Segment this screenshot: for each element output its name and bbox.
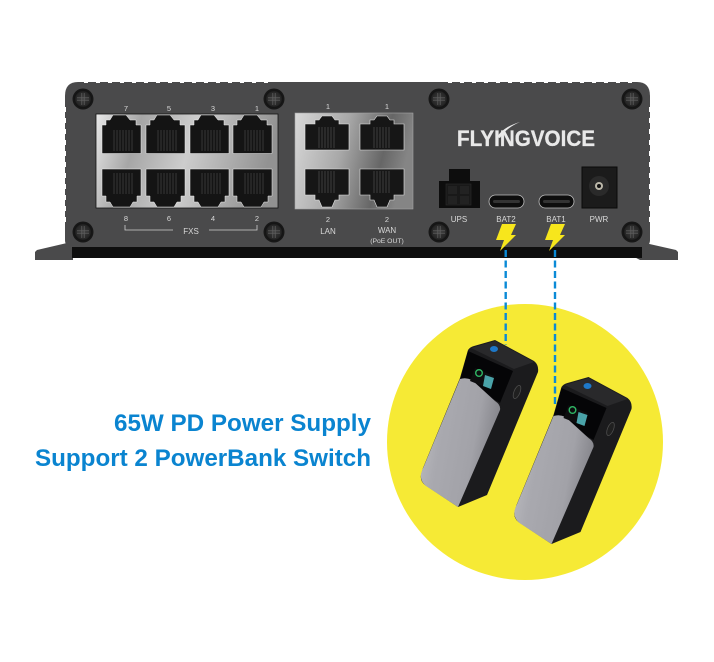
icon: BAT1 lightning bolt xyxy=(545,224,565,251)
BAT2 USB-C port xyxy=(489,195,524,208)
headline line 2: Support 2 PowerBank Switch xyxy=(35,445,371,472)
FXS port panel xyxy=(96,114,278,208)
PWR jack xyxy=(582,167,617,208)
port labels: FXS xyxy=(183,227,199,236)
dashed connector BAT2 xyxy=(505,250,507,345)
port labels: UPS xyxy=(451,215,467,224)
port labels: 7 xyxy=(124,104,128,113)
left mounting flange xyxy=(35,243,73,260)
port labels: 5 xyxy=(167,104,171,113)
UPS connector xyxy=(439,169,480,208)
right mounting flange xyxy=(617,243,678,260)
port labels: 1 xyxy=(385,102,389,111)
port labels: 2 xyxy=(385,215,389,224)
port labels: 6 xyxy=(167,214,171,223)
port labels: (PoE OUT) xyxy=(370,238,404,245)
headline text xyxy=(35,410,372,472)
yellow circle xyxy=(387,304,663,580)
BAT1 USB-C port xyxy=(539,195,574,208)
icon: BAT2 lightning bolt xyxy=(496,224,516,251)
FXS bracket xyxy=(125,225,257,230)
port labels: PWR xyxy=(590,215,609,224)
port labels: 1 xyxy=(255,104,259,113)
port labels xyxy=(124,102,609,245)
port labels: WAN xyxy=(378,226,396,235)
network device xyxy=(35,81,678,260)
LAN and WAN port panel xyxy=(295,113,413,209)
port labels: LAN xyxy=(320,227,336,236)
port labels: 3 xyxy=(211,104,215,113)
power bank 1 xyxy=(421,340,538,507)
dashed connector BAT1 xyxy=(554,250,556,405)
port labels: 8 xyxy=(124,214,128,223)
port labels: 1 xyxy=(326,102,330,111)
headline line 1: 65W PD Power Supply xyxy=(114,410,372,437)
port labels: BAT1 xyxy=(546,215,566,224)
port labels: 2 xyxy=(326,215,330,224)
port labels: BAT2 xyxy=(496,215,516,224)
port labels: 4 xyxy=(211,214,215,223)
screws xyxy=(72,88,642,242)
device body xyxy=(65,82,650,247)
power bank 2 xyxy=(514,377,632,544)
port labels: 2 xyxy=(255,214,259,223)
brand logo: FLYINGVOICE xyxy=(457,126,595,151)
underside shadow xyxy=(72,247,642,258)
body edge fins xyxy=(64,81,651,222)
